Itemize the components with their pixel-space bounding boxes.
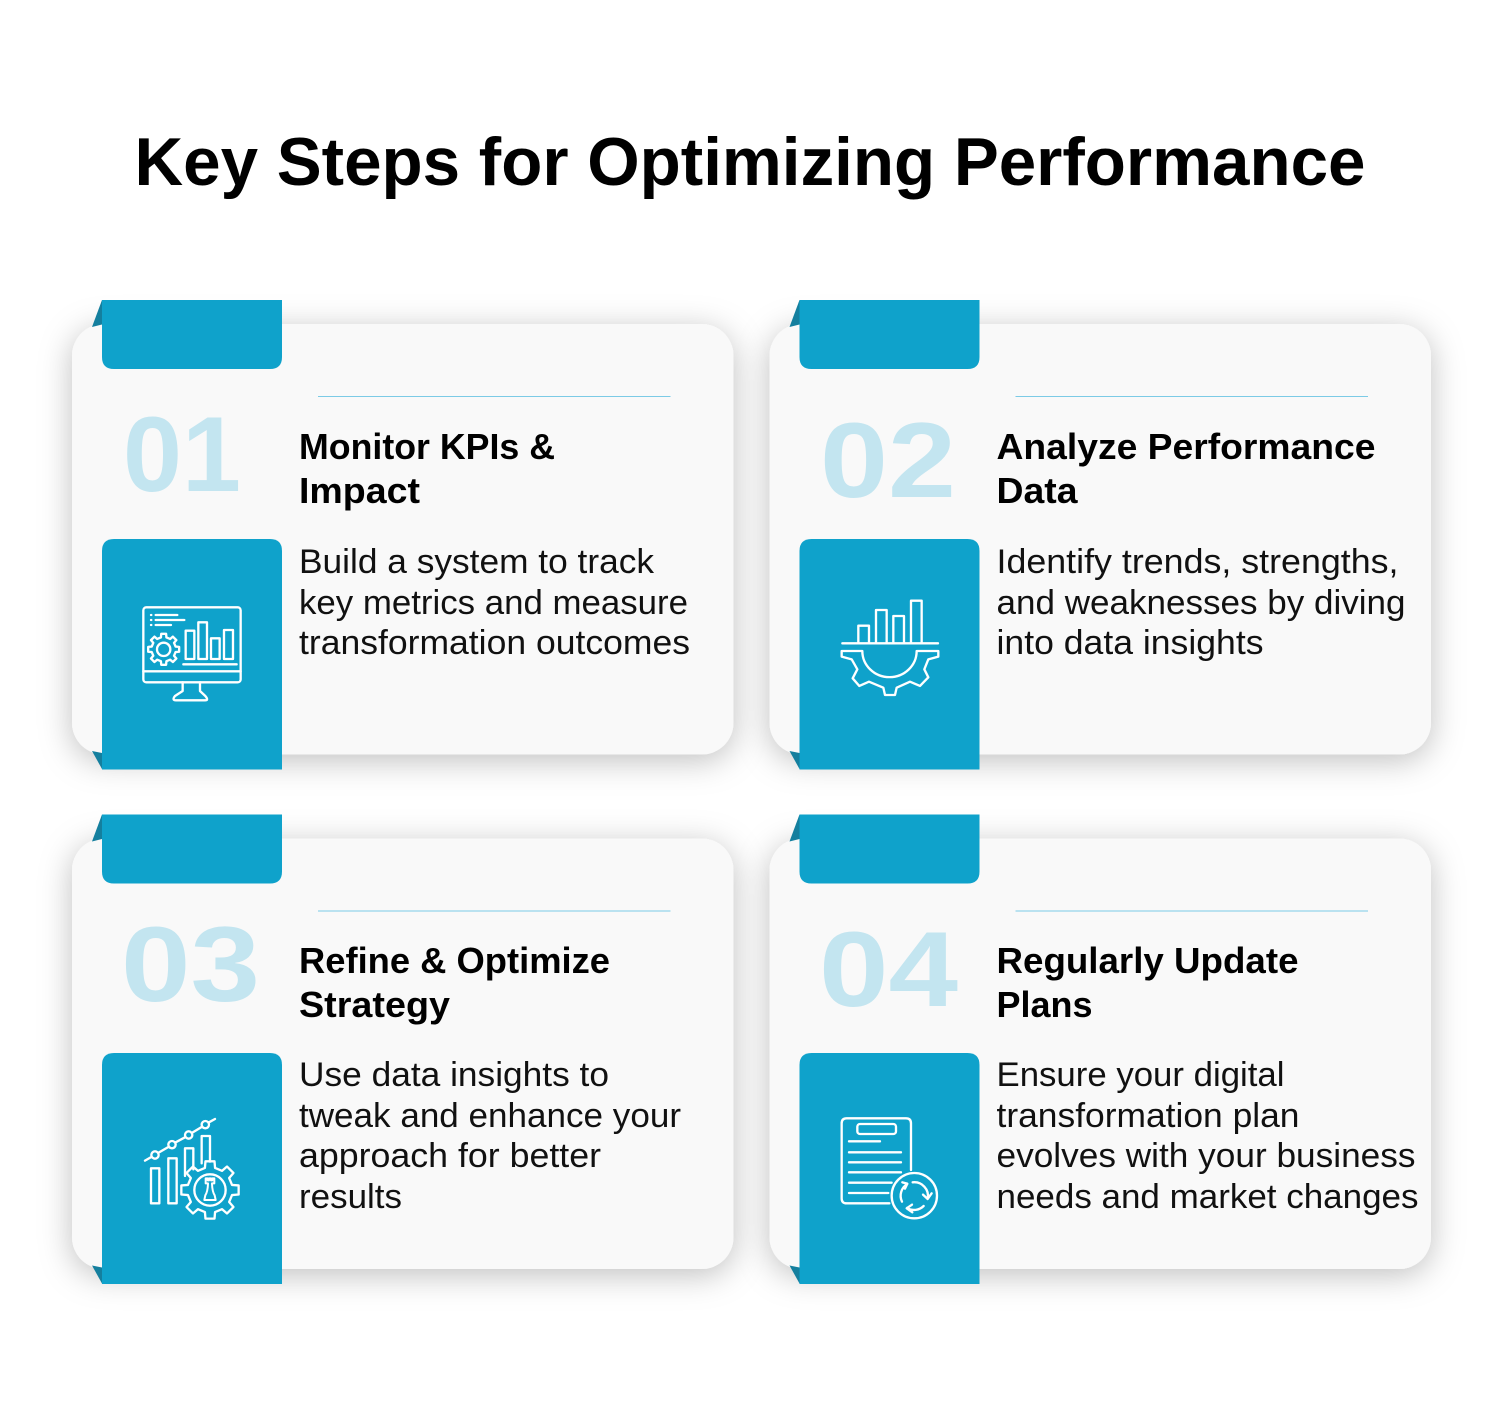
heading 02: Analyze Performance [996, 426, 1376, 467]
icon: document with refresh cycle [842, 1118, 937, 1218]
step number 01: 01 [123, 394, 241, 514]
card 3 background [72, 838, 734, 1269]
card 2 icon panel [790, 539, 980, 770]
description 04 [996, 1056, 1418, 1216]
card 4 top tab [790, 814, 980, 884]
card 1 background [72, 324, 734, 754]
heading 04: Plans [996, 984, 1092, 1025]
step number 04: 04 [819, 909, 958, 1029]
heading 02 [996, 426, 1376, 511]
description 04: evolves with your business [996, 1137, 1416, 1175]
panel: step 02 [770, 300, 1431, 770]
description 02 [996, 543, 1406, 662]
description 04: needs and market changes [996, 1178, 1418, 1216]
description 02: and weaknesses by diving [996, 584, 1406, 622]
panel: step 03 [72, 814, 734, 1284]
description 01: key metrics and measure [299, 584, 688, 622]
card 4 background [770, 838, 1431, 1269]
description 01: Build a system to track [299, 543, 655, 581]
icon: monitor with gear and bars [143, 607, 241, 700]
heading 02: Data [996, 470, 1078, 511]
card 4 icon panel [790, 1053, 980, 1284]
heading 01: Monitor KPIs & [299, 426, 555, 467]
divider [318, 396, 670, 397]
description 04: transformation plan [996, 1097, 1300, 1135]
heading 01 [299, 426, 555, 511]
description 03: tweak and enhance your [299, 1097, 681, 1135]
description 03: approach for better [299, 1137, 601, 1175]
divider [1016, 910, 1368, 912]
description 03: results [299, 1178, 402, 1216]
card 3 icon panel [92, 1053, 282, 1284]
description 03: Use data insights to [299, 1056, 609, 1094]
card 1 top tab [92, 300, 282, 369]
heading 03: Strategy [299, 984, 451, 1025]
card 2 top tab [790, 300, 980, 369]
description 01: transformation outcomes [299, 624, 690, 662]
icon: bars over half gear [842, 601, 938, 695]
description 01 [299, 543, 690, 662]
heading 04 [996, 940, 1298, 1025]
title: Key Steps for Optimizing Performance [134, 124, 1366, 200]
description 02: into data insights [996, 624, 1264, 662]
heading 03: Refine & Optimize [299, 940, 610, 981]
heading 03 [299, 940, 610, 1025]
step number 03: 03 [121, 904, 260, 1024]
card 3 top tab [92, 814, 282, 884]
divider [318, 910, 670, 912]
panel: step 01 [72, 300, 734, 770]
description 03 [299, 1056, 681, 1216]
card 1 icon panel [92, 539, 282, 770]
step number 02: 02 [820, 400, 956, 520]
heading 04: Regularly Update [996, 940, 1298, 981]
panel: step 04 [770, 814, 1431, 1284]
divider [1016, 396, 1368, 397]
heading 01: Impact [299, 470, 420, 511]
icon: growth chart with gear and chess rook [145, 1119, 239, 1219]
description 02: Identify trends, strengths, [996, 543, 1398, 581]
description 04: Ensure your digital [996, 1056, 1284, 1094]
card 2 background [770, 324, 1431, 754]
